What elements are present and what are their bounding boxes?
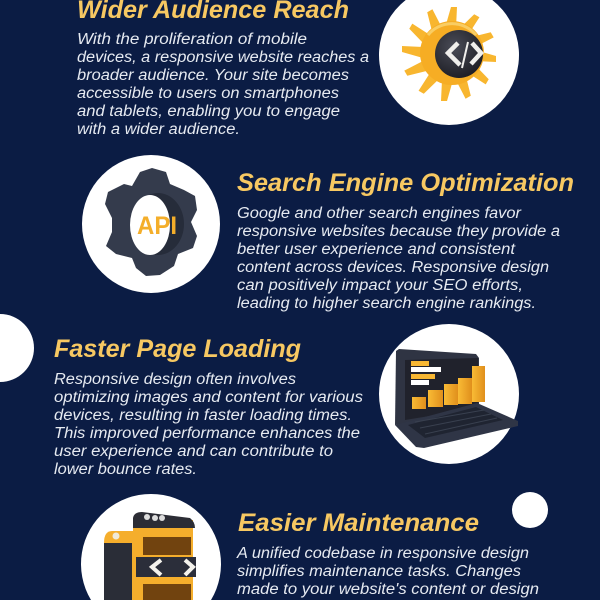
heading: search engine optimization: Search Engine Optimization [237, 169, 574, 197]
text block: search engine optimization: responsive websites because they provide a [237, 223, 560, 240]
panel: wider audience reach [77, 0, 519, 138]
text block: wider audience reach: with a wider audience. [77, 121, 240, 138]
text block: faster page loading: user experience and can contribute to [54, 443, 333, 460]
text block: search engine optimization [237, 205, 560, 312]
text block: wider audience reach: and tablets, enabling you to engage [77, 103, 340, 120]
text block: wider audience reach: With the proliferation of mobile [77, 31, 307, 48]
text block: wider audience reach: accessible to users on smartphones [77, 85, 339, 102]
text block: faster page loading: lower bounce rates. [54, 461, 197, 478]
text block: wider audience reach: broader audience. Your site becomes [77, 67, 349, 84]
icon: browser windows [81, 494, 221, 600]
icon: API gear: API [137, 212, 177, 240]
heading: easier maintenance: Easier Maintenance [238, 509, 479, 537]
text block: faster page loading: Responsive design often involves [54, 371, 296, 388]
text block: search engine optimization: content across devices. Responsive design [237, 259, 549, 276]
panel: easier maintenance [81, 494, 539, 600]
text block: faster page loading: This improved performance enhances the [54, 425, 360, 442]
panel: search engine optimization [82, 155, 574, 312]
icon: laptop with bar chart [379, 324, 519, 464]
decorative circle: left [0, 314, 34, 382]
icon: code gear [379, 0, 519, 125]
text block: faster page loading: optimizing images and content for various [54, 389, 363, 406]
heading: faster page loading: Faster Page Loading [54, 335, 301, 363]
panel: faster page loading [54, 324, 519, 478]
text block: search engine optimization: can positively impact your SEO efforts, [237, 277, 523, 294]
decorative circle: right [512, 492, 548, 528]
text block: easier maintenance: made to your website's content or design [237, 581, 539, 598]
text block: easier maintenance: A unified codebase in responsive design [236, 545, 529, 562]
text block: easier maintenance: simplifies maintenance tasks. Changes [237, 563, 521, 580]
text block: wider audience reach: devices, a responsive website reaches a [77, 49, 369, 66]
text block: search engine optimization: better user experience and consistent [237, 241, 516, 258]
text block: search engine optimization: leading to higher search engine rankings. [237, 295, 536, 312]
text block: faster page loading: devices, resulting in faster loading times. [54, 407, 352, 424]
icon: API gear [82, 155, 220, 293]
text block: easier maintenance [236, 545, 539, 598]
text block: faster page loading [54, 371, 363, 478]
text block: wider audience reach [77, 31, 369, 138]
text block: search engine optimization: Google and other search engines favor [237, 205, 522, 222]
